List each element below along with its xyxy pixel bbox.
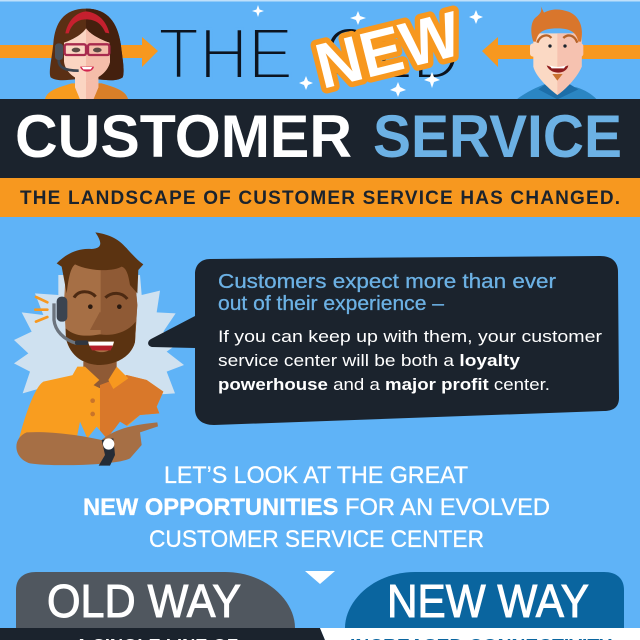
panel: old way description xyxy=(0,628,325,640)
arrow: right orange xyxy=(482,37,640,67)
banner: subtitle xyxy=(0,178,640,217)
banner: main title: CUSTOMER xyxy=(15,103,352,170)
icon: sparkles xyxy=(252,5,483,97)
panel: new way description xyxy=(320,628,640,640)
text: intro heading: LET’S LOOK AT THE GREAT xyxy=(164,462,468,489)
text: intro heading: NEW OPPORTUNITIES FOR AN EVOLVED xyxy=(83,494,550,521)
text: bubble body xyxy=(218,328,603,394)
icon: woman with headset xyxy=(45,9,128,99)
banner: main title xyxy=(0,99,640,178)
icon: man xyxy=(517,6,597,99)
title: struck OLD: OLD xyxy=(324,14,460,94)
text: bubble heading xyxy=(218,270,556,315)
icon: agent with headset xyxy=(14,232,184,466)
text: bubble heading: out of their experience – xyxy=(218,292,445,315)
callout: speech bubble xyxy=(148,256,619,425)
text: bubble body: powerhouse and a major profit center. xyxy=(218,376,550,394)
banner: subtitle: THE LANDSCAPE OF CUSTOMER SERVICE HAS CHANGED. xyxy=(20,188,620,209)
title: THE: THE xyxy=(158,14,293,94)
text: bubble body: service center will be both a loyalty xyxy=(218,352,521,370)
text: bubble heading: Customers expect more than ever xyxy=(218,270,556,293)
icon: down triangle xyxy=(305,571,335,584)
text: intro heading xyxy=(83,462,550,553)
panel: old way: OLD WAY xyxy=(47,575,241,627)
panel: new way: NEW WAY xyxy=(387,575,589,627)
text: bubble body: If you can keep up with them, your customer xyxy=(218,328,603,346)
banner: main title: SERVICE xyxy=(373,103,622,170)
text: intro heading: CUSTOMER SERVICE CENTER xyxy=(149,526,484,553)
arrow: left orange xyxy=(0,37,158,67)
panel: old way xyxy=(16,572,295,628)
